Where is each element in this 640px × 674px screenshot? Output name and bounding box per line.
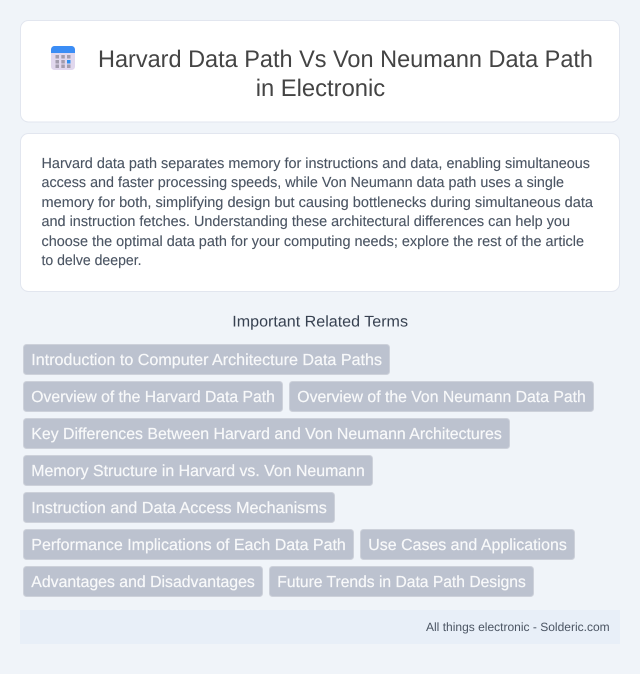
text block: summary paragraph: access and faster processing speeds, while Von Neumann data path uses a single <box>42 175 564 191</box>
tag: von neumann overview <box>290 382 594 412</box>
footer: All things electronic - Solderic.com <box>426 620 610 634</box>
text block: summary paragraph: to delve deeper. <box>42 253 142 269</box>
tag: use cases <box>360 530 574 560</box>
text block: summary paragraph <box>42 156 594 269</box>
tag: future trends: Future Trends in Data Path Designs <box>277 574 526 591</box>
title: in Electronic <box>256 75 385 102</box>
panel: title card <box>20 20 620 122</box>
footer <box>20 610 620 644</box>
tag: von neumann overview: Overview of the Von Neumann Data Path <box>297 389 586 406</box>
title <box>98 46 593 102</box>
tag: key differences: Key Differences Between Harvard and Von Neumann Architectures <box>31 426 502 443</box>
tag: use cases: Use Cases and Applications <box>368 537 567 554</box>
tag: introduction: Introduction to Computer Architecture Data Paths <box>31 352 382 369</box>
tag: performance: Performance Implications of Each Data Path <box>31 537 346 554</box>
title: Harvard Data Path Vs Von Neumann Data Path <box>98 46 593 73</box>
heading: important related terms: Important Related Terms <box>232 314 408 330</box>
icon: calendar <box>51 46 75 70</box>
tag: performance <box>24 530 354 560</box>
tag: memory structure <box>24 456 372 486</box>
tag: access mechanisms <box>24 492 334 522</box>
panel: related term tags <box>24 344 594 596</box>
tag: advantages: Advantages and Disadvantages <box>31 574 255 591</box>
tag: access mechanisms: Instruction and Data Access Mechanisms <box>31 500 327 517</box>
tag: key differences <box>24 418 510 448</box>
tag: memory structure: Memory Structure in Harvard vs. Von Neumann <box>31 463 365 480</box>
text block: summary paragraph: and instruction fetches. Understanding these architectural differences can help you <box>42 214 570 230</box>
text block: summary paragraph: Harvard data path separates memory for instructions and data, enabling simultaneous <box>42 156 590 172</box>
text block: summary paragraph: memory for both, simplifying design but causing bottlenecks during simultaneous data <box>42 195 594 211</box>
tag: introduction <box>24 344 390 374</box>
tag: harvard overview: Overview of the Harvard Data Path <box>31 389 275 406</box>
tag: future trends <box>270 566 534 596</box>
tag: harvard overview <box>24 382 282 412</box>
panel: summary card <box>20 134 620 292</box>
tag: advantages <box>24 566 262 596</box>
text block: summary paragraph: choose the optimal data path for your computing needs; explore the rest of the article <box>42 234 584 250</box>
